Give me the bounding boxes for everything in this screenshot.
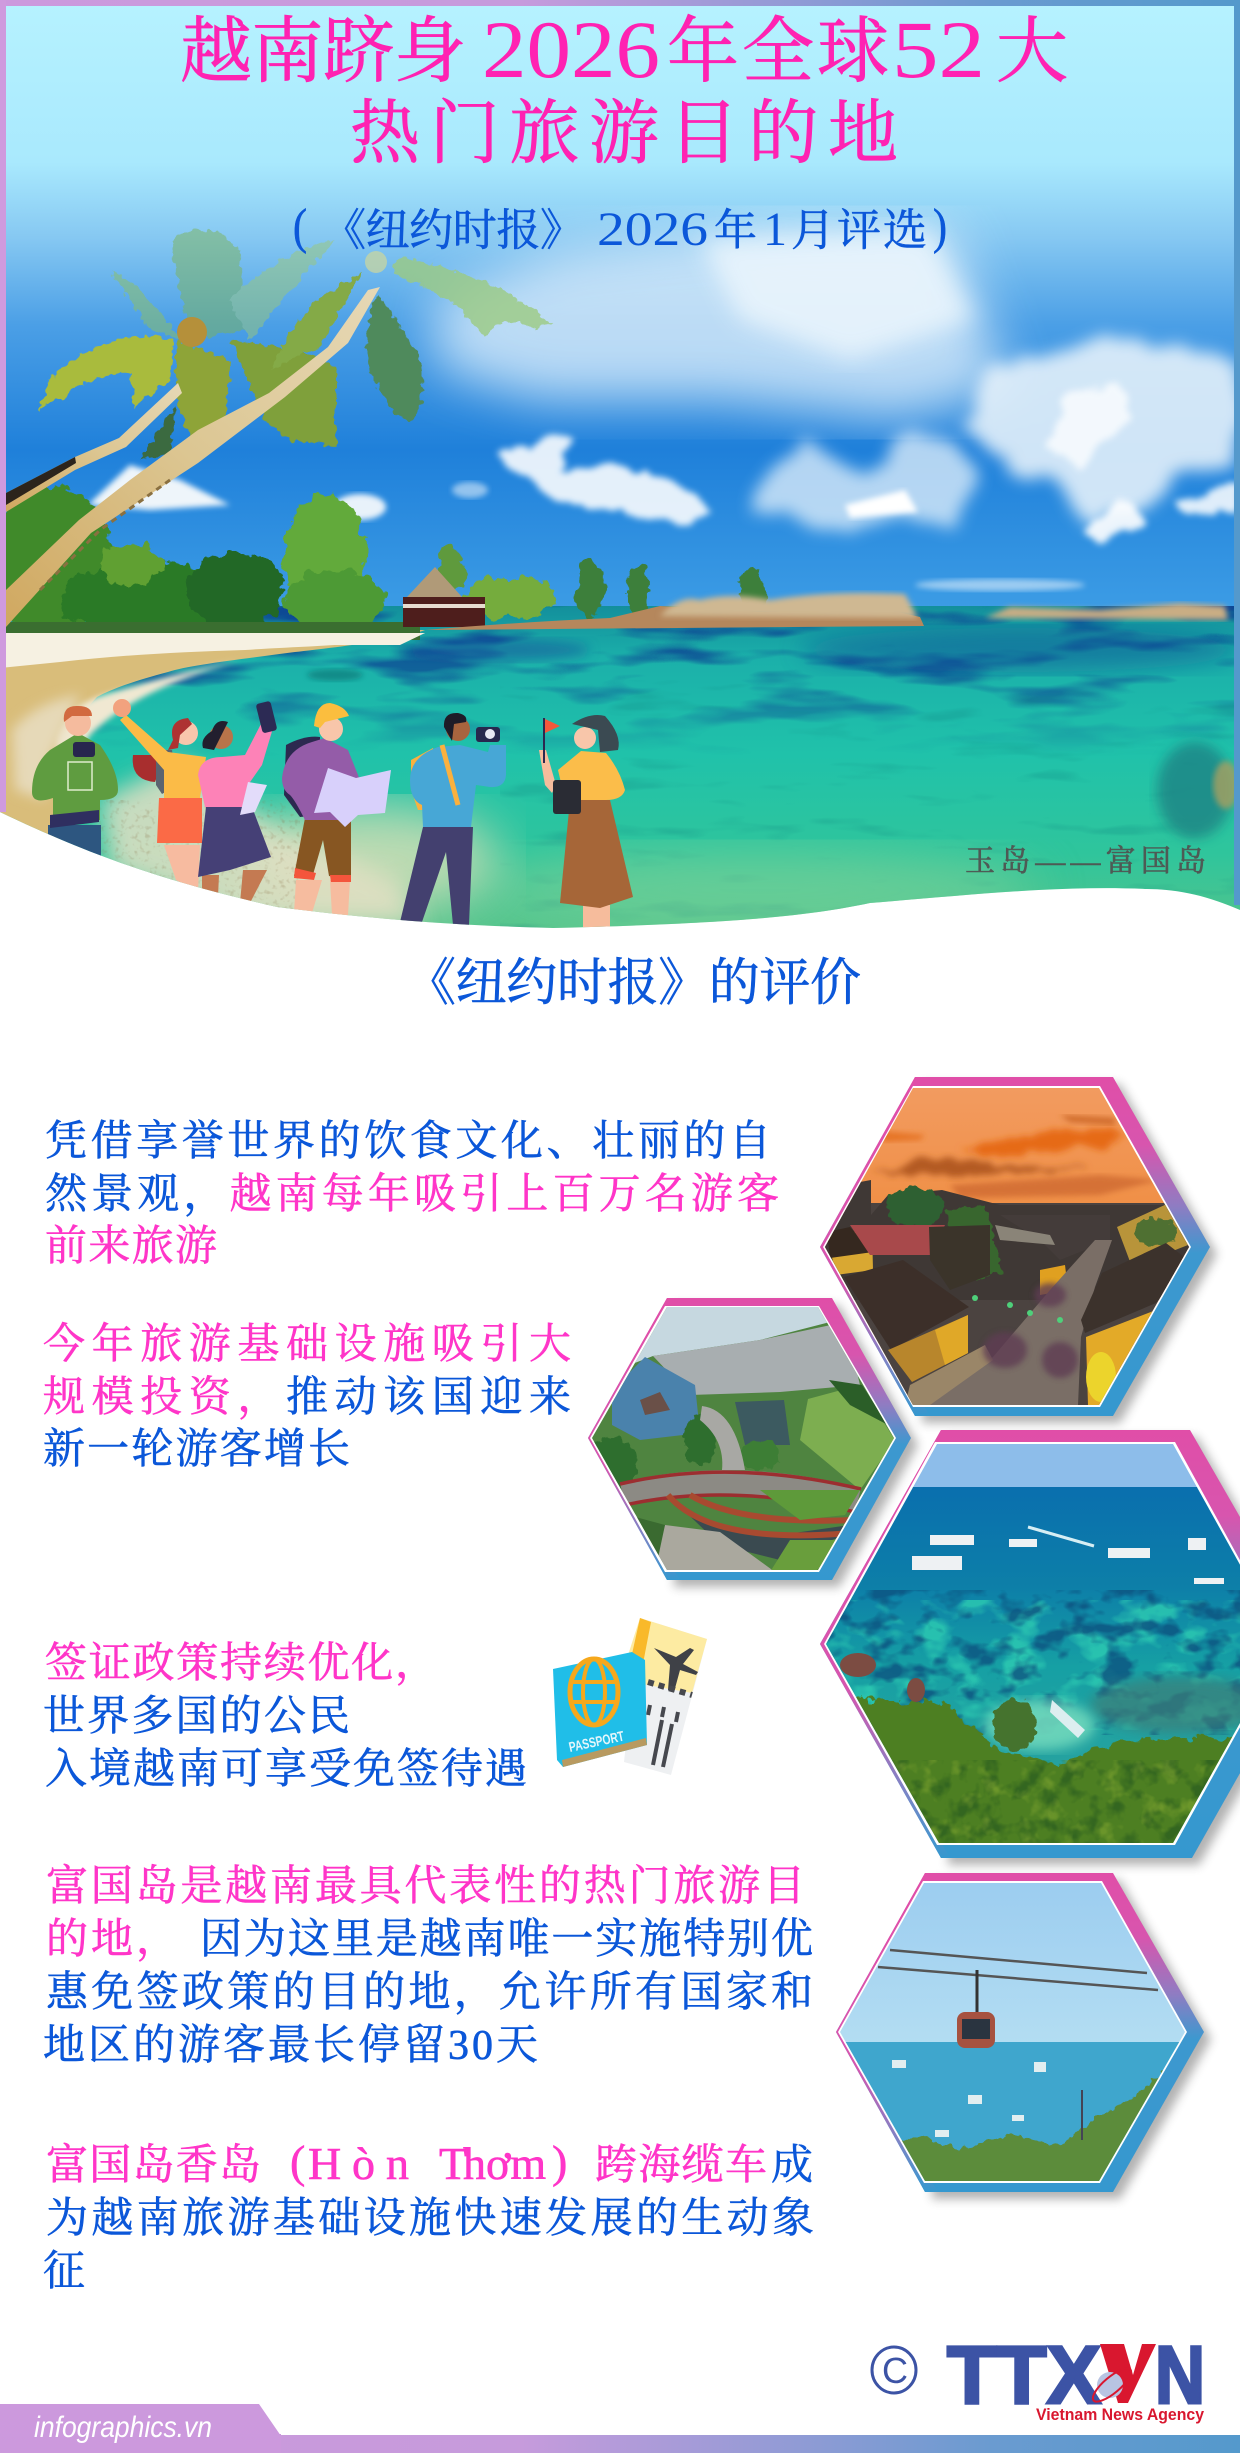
text block 3: 入境越南可享受免签待遇 <box>45 1746 527 1793</box>
logo: TTXVN: Vietnam News Agency <box>1036 2405 1204 2424</box>
sky <box>0 0 1240 625</box>
text block 5: H <box>308 2138 341 2189</box>
title: 52 <box>892 4 985 95</box>
subtitle: 年 <box>714 207 757 255</box>
photo hexagon: coral sea with boats <box>820 1430 1240 1865</box>
logo: TTXVN <box>947 2330 1205 2424</box>
rocky islets <box>425 593 1228 630</box>
subtitle: ) <box>933 198 947 254</box>
photo hexagon: Phu Quoc resort hill <box>587 1298 918 1587</box>
text block 5: 为越南旅游基础设施快速发展的生动象 <box>46 2195 814 2242</box>
subtitle: 《纽约时报》 <box>322 206 584 255</box>
person: guide with flag <box>539 715 633 929</box>
text block 5: T <box>439 2138 467 2189</box>
copyright symbol <box>872 2347 916 2393</box>
text block 5 <box>43 2136 814 2295</box>
text block 5: 跨海缆车 <box>595 2142 767 2189</box>
photo hexagon: Hoi An old town <box>820 1077 1217 1423</box>
sea <box>0 606 1240 936</box>
section heading: 《纽约时报》的评价 <box>405 956 861 1012</box>
hut <box>403 567 485 627</box>
person: green hoodie <box>32 706 118 856</box>
text block 4: 的地， <box>46 1917 178 1963</box>
text block 2: 今年旅游基础设施吸引大 <box>43 1321 571 1368</box>
title <box>180 4 1068 173</box>
text block 5: n <box>386 2138 409 2189</box>
person: blue sweater with camera <box>400 713 506 925</box>
subtitle: 月评选 <box>791 206 927 255</box>
hero photo: Phu Quoc beach <box>0 0 1240 936</box>
text block 4: 惠免签政策的目的地，允许所有国家和 <box>46 1970 813 2016</box>
text block 3: 签证政策持续优化， <box>45 1641 437 1687</box>
clouds <box>88 225 1236 591</box>
text block 5: ( <box>290 2136 305 2187</box>
logo: TTXVN: N <box>1155 2330 1205 2421</box>
caption: 玉岛——富国岛 <box>965 845 1206 878</box>
photo hexagon: Hon Thom cable car <box>836 1873 1211 2199</box>
tourists illustration <box>32 699 633 929</box>
text block 1: 前来旅游 <box>45 1224 217 1270</box>
person: yellow top and orange shorts <box>113 699 206 892</box>
person: purple shirt with map <box>282 703 391 915</box>
text block 1: 然景观，越南每年吸引上百万名游客 <box>45 1171 779 1218</box>
text block 2 <box>43 1321 571 1473</box>
text block 4: 因为这里是越南唯一实施特别优 <box>200 1916 813 1963</box>
person: pink top and navy skirt <box>198 701 277 903</box>
icon: passport and ticket <box>553 1618 707 1775</box>
footer bar <box>0 2404 1240 2453</box>
text block 2: 规模投资，推动该国迎来 <box>43 1374 571 1421</box>
title: 大 <box>996 12 1068 92</box>
subtitle: ( <box>293 198 307 254</box>
sea shading <box>0 606 1240 932</box>
text block 1 <box>45 1118 779 1270</box>
beach <box>0 630 425 925</box>
text block 5: hơm <box>463 2138 546 2189</box>
footer bar: infographics.vn <box>34 2411 212 2444</box>
subtitle: 1 <box>763 203 787 256</box>
text block 5: 富国岛香岛 <box>46 2142 261 2189</box>
frame: top and side bands <box>0 0 1240 905</box>
subtitle <box>293 198 947 256</box>
icon: passport and ticket: PASSPORT <box>567 1728 626 1755</box>
text block 3 <box>43 1641 527 1793</box>
title: 2026 <box>482 4 660 95</box>
logo: TTXVN: TTX <box>947 2330 1101 2421</box>
text block 5: ) <box>552 2136 567 2187</box>
palm trees <box>6 230 553 627</box>
subtitle: 2026 <box>597 203 708 256</box>
copyright symbol: C <box>882 2350 908 2391</box>
text block 5: ò <box>352 2138 375 2189</box>
text block 4: 富国岛是越南最具代表性的热门旅游目 <box>46 1863 805 1910</box>
text block 4 <box>43 1863 813 2069</box>
text block 5: 成 <box>771 2143 813 2189</box>
shore vegetation <box>0 485 765 645</box>
title: 越南跻身 <box>180 12 466 92</box>
title: 年全球 <box>667 12 889 92</box>
text block 2: 新一轮游客增长 <box>43 1426 350 1473</box>
text block 4: 地区的游客最长停留30天 <box>43 2022 538 2069</box>
text block 1: 凭借享誉世界的饮食文化、壮丽的自 <box>45 1118 771 1165</box>
title: 热门旅游目的地 <box>350 96 898 173</box>
text block 5: 征 <box>43 2249 85 2295</box>
text block 3: 世界多国的公民 <box>43 1694 350 1740</box>
